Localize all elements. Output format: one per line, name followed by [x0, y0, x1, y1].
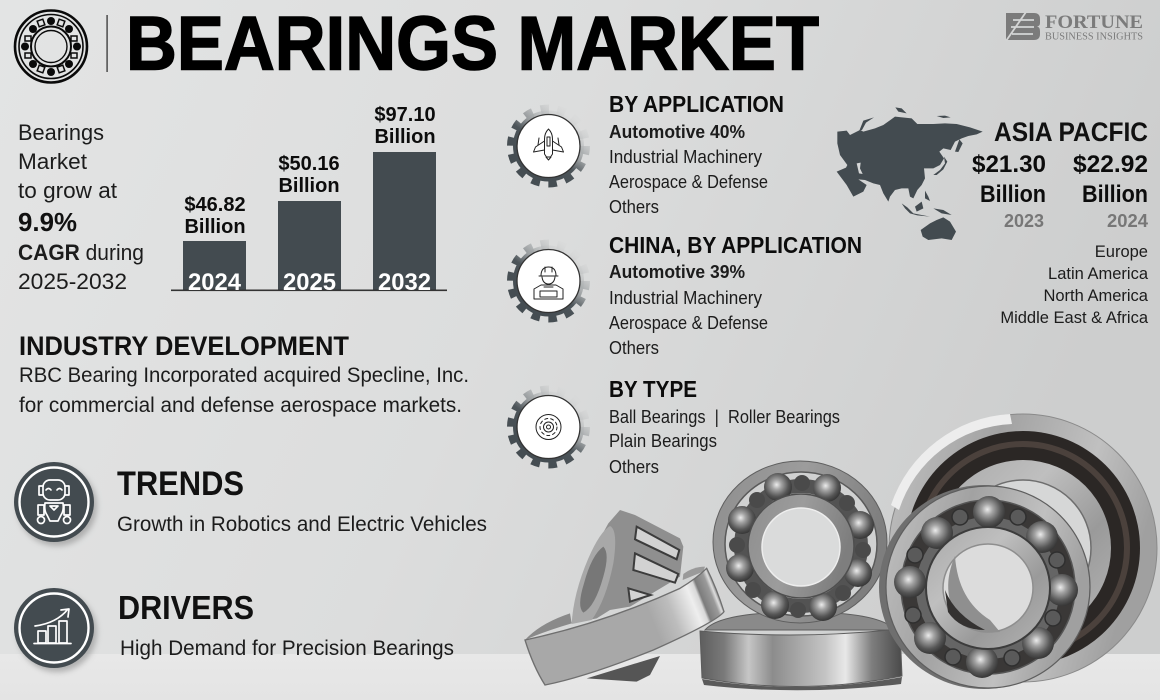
- text block: by type: Others: [609, 457, 659, 477]
- text block: Asia Pacific values: $22.92: [1073, 151, 1148, 178]
- text block: by application: Automotive 40%: [609, 122, 745, 142]
- bearing: cylinder base: [700, 612, 902, 690]
- text block: industry development: for commercial and defense aerospace markets.: [19, 394, 462, 417]
- trends: TRENDS: [117, 465, 244, 503]
- logo: Fortune Business Insights: FORTUNE: [1045, 12, 1143, 33]
- text block: by application: Aerospace & Defense: [609, 172, 768, 192]
- bearing: large back: [889, 414, 1157, 682]
- text block: China by application: Industrial Machinery: [609, 288, 762, 308]
- text block: industry development: INDUSTRY DEVELOPMENT: [19, 331, 349, 361]
- text block: other regions: [1000, 243, 1149, 327]
- bar chart: Billion: [184, 216, 246, 238]
- icon: robot: [14, 462, 97, 546]
- gear icon: aerospace: [512, 110, 585, 182]
- text block: Asia Pacific values: 2023: [1004, 211, 1044, 231]
- icon: bearing logo: [15, 10, 87, 82]
- bearing: tapered roller cone: [572, 510, 683, 682]
- text block: CAGR statement: [18, 120, 144, 294]
- bar chart: Billion: [278, 175, 340, 197]
- text block: by application: BY APPLICATION: [609, 91, 784, 117]
- text block: CAGR statement: Market: [18, 149, 87, 174]
- gear icon: bearing: [512, 390, 585, 464]
- gear icon: worker: [512, 244, 585, 318]
- bar chart: Billion: [374, 126, 436, 148]
- text block: by type: Ball Bearings | Roller Bearings: [609, 407, 840, 427]
- text block: China by application: Others: [609, 338, 659, 358]
- text block: by type: BY TYPE: [609, 376, 697, 402]
- bar chart: $46.82: [184, 194, 246, 216]
- text block: Asia Pacific values: ASIA PACFIC: [994, 117, 1148, 147]
- bar chart: 2032: [378, 269, 431, 296]
- text block: industry development: RBC Bearing Incorporated acquired Specline, Inc.: [19, 364, 469, 387]
- text block: China by application: Automotive 39%: [609, 262, 745, 282]
- drivers: High Demand for Precision Bearings: [120, 637, 454, 660]
- photo: bearings group: [525, 414, 1157, 690]
- text block: China by application: [609, 232, 862, 358]
- bearing: middle ball: [713, 461, 887, 623]
- drivers: DRIVERS: [118, 589, 254, 626]
- trends: [117, 465, 487, 536]
- text block: China by application: CHINA, BY APPLICATION: [609, 232, 862, 258]
- map: Asia Pacific: [837, 107, 983, 240]
- text block: by type: Plain Bearings: [609, 431, 717, 451]
- text block: CAGR statement: to grow at: [18, 178, 117, 203]
- text block: Asia Pacific values: Billion: [980, 181, 1046, 208]
- text block: Asia Pacific values: [972, 117, 1148, 231]
- text block: CAGR statement: 2025-2032: [18, 269, 127, 294]
- drivers: [118, 589, 454, 660]
- text block: Asia Pacific values: Billion: [1082, 181, 1148, 208]
- logo: Fortune Business Insights: BUSINESS INSIGHTS: [1045, 32, 1143, 42]
- logo: Fortune Business Insights: [1006, 12, 1143, 42]
- text block: industry development: [19, 331, 469, 417]
- bearing: tapered outer ring: [525, 567, 724, 685]
- text block: by type: [609, 376, 840, 477]
- text block: China by application: Aerospace & Defense: [609, 313, 768, 333]
- text block: by application: Others: [609, 197, 659, 217]
- icon: growth chart: [14, 588, 97, 672]
- text block: other regions: Latin America: [1048, 265, 1149, 283]
- text block: Asia Pacific values: $21.30: [972, 151, 1046, 178]
- text block: CAGR statement: 9.9%: [18, 207, 77, 237]
- trends: Growth in Robotics and Electric Vehicles: [117, 513, 487, 536]
- divider: [106, 15, 108, 72]
- text block: other regions: Middle East & Africa: [1000, 309, 1149, 327]
- text block: CAGR statement: CAGR during: [18, 240, 144, 265]
- bar chart: $50.16: [278, 153, 340, 175]
- bearing: large front ball: [879, 485, 1090, 689]
- text block: other regions: North America: [1043, 287, 1149, 305]
- text block: by application: Industrial Machinery: [609, 147, 762, 167]
- bar chart: 2024: [188, 269, 242, 296]
- bar chart: 2025: [283, 269, 336, 296]
- bar chart: [171, 104, 447, 296]
- bar chart: $97.10: [374, 104, 436, 126]
- title: BEARINGS MARKET: [126, 2, 819, 86]
- text block: CAGR statement: Bearings: [18, 120, 104, 145]
- text block: Asia Pacific values: 2024: [1107, 211, 1148, 231]
- text block: other regions: Europe: [1095, 243, 1148, 261]
- text block: by application: [609, 91, 784, 217]
